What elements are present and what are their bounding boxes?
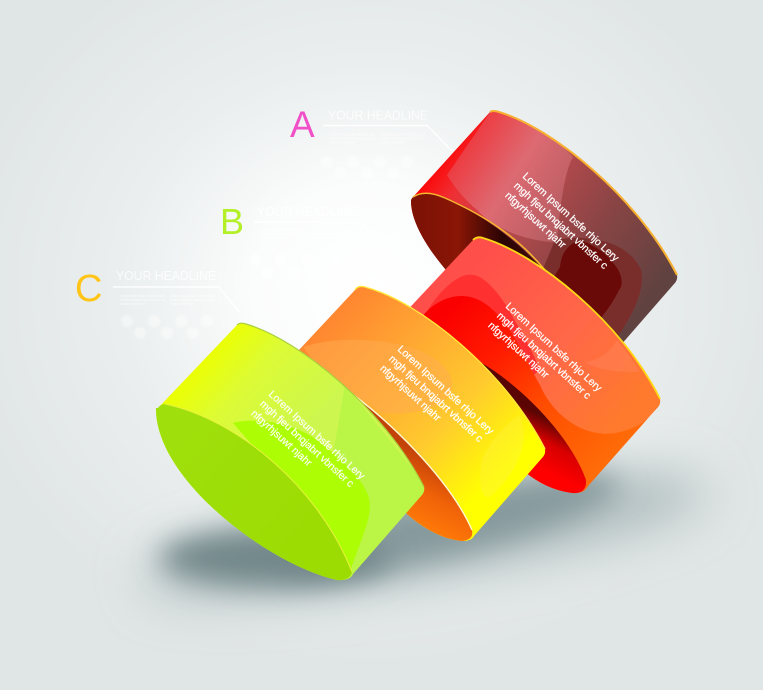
small text C [120, 294, 215, 306]
connector line A [323, 126, 453, 152]
dark red cylinder face [411, 193, 560, 320]
red band text: Lorem Ipsum bsfe rhjo Lery [503, 300, 605, 395]
small text C: eiusmod tempor [120, 302, 146, 306]
letter C: C [75, 268, 102, 310]
small text A: Lorem ipsum dolor sit amet cons [330, 132, 375, 136]
green cylinder face [156, 404, 352, 580]
small text B: eiusmod tempor [260, 236, 286, 240]
green face rim [165, 404, 352, 572]
small text C: eiusmod tempor [170, 302, 196, 306]
letter A: A [290, 104, 315, 145]
small text B: eiusmod tempor [310, 236, 336, 240]
band: red cylinder [410, 236, 661, 494]
small text C: ectetur adipiscing elit sed do [170, 298, 215, 302]
band: dark red cylinder [411, 110, 678, 342]
dots A [321, 156, 413, 179]
dark red band text: mgh fjeu bnqjabrt vbnsfer c [511, 180, 610, 272]
band: orange cylinder [299, 286, 546, 541]
green band text: mgh fjeu bnqjabrt vbnsfer c [257, 398, 356, 490]
dots B [249, 254, 341, 279]
orange face rim [340, 385, 472, 530]
small text C: Lorem ipsum dolor sit amet cons [120, 294, 165, 298]
small text B: Lorem ipsum dolor sit amet cons [260, 228, 305, 232]
ground shadow [137, 447, 713, 623]
small text C: Lorem ipsum dolor sit amet cons [170, 294, 215, 298]
red cylinder face [480, 362, 586, 493]
small text A: eiusmod tempor [330, 140, 356, 144]
green band text: nfgyrhjsuwt njahr [248, 408, 315, 469]
green band text: Lorem Ipsum bsfe rhjo Lery [266, 388, 368, 483]
panel A: headline block [290, 104, 453, 179]
small text A: ectetur adipiscing elit sed do [330, 136, 375, 140]
small text B: ectetur adipiscing elit sed do [310, 232, 355, 236]
connector line C [113, 287, 240, 313]
dots C [121, 315, 213, 339]
small text A: ectetur adipiscing elit sed do [380, 136, 425, 140]
headline B: YOUR HEADLINE [257, 204, 357, 219]
orange band text: nfgyrhjsuwt njahr [377, 363, 444, 424]
red top rim [473, 237, 660, 399]
panel B: headline block [220, 201, 386, 279]
green top rim [237, 323, 424, 487]
small text B: ectetur adipiscing elit sed do [260, 232, 305, 236]
dark red top rim [490, 111, 677, 275]
red band text: mgh fjeu bnqjabrt vbnsfer c [494, 310, 593, 402]
small text A: Lorem ipsum dolor sit amet cons [380, 132, 425, 136]
band: green cylinder [150, 315, 435, 585]
small text A: eiusmod tempor [380, 140, 406, 144]
orange band text: Lorem Ipsum bsfe rhjo Lery [395, 343, 497, 438]
small text B [260, 228, 355, 240]
small text A [330, 132, 425, 144]
red band text: nfgyrhjsuwt njahr [485, 320, 552, 381]
panel C: headline block [75, 268, 240, 339]
letter B: B [220, 201, 244, 242]
dark red band text: Lorem Ipsum bsfe rhjo Lery [520, 170, 622, 265]
small text B: Lorem ipsum dolor sit amet cons [310, 228, 355, 232]
dark red band text: nfgyrhjsuwt njahr [502, 190, 569, 251]
headline C: YOUR HEADLINE [116, 268, 216, 283]
orange top rim [355, 286, 545, 449]
connector line B [254, 222, 386, 250]
dark red face rim [413, 193, 545, 270]
orange cylinder face [340, 385, 472, 541]
orange band text: mgh fjeu bnqjabrt vbnsfer c [386, 353, 485, 445]
headline A: YOUR HEADLINE [328, 108, 428, 122]
small text C: ectetur adipiscing elit sed do [120, 298, 165, 302]
